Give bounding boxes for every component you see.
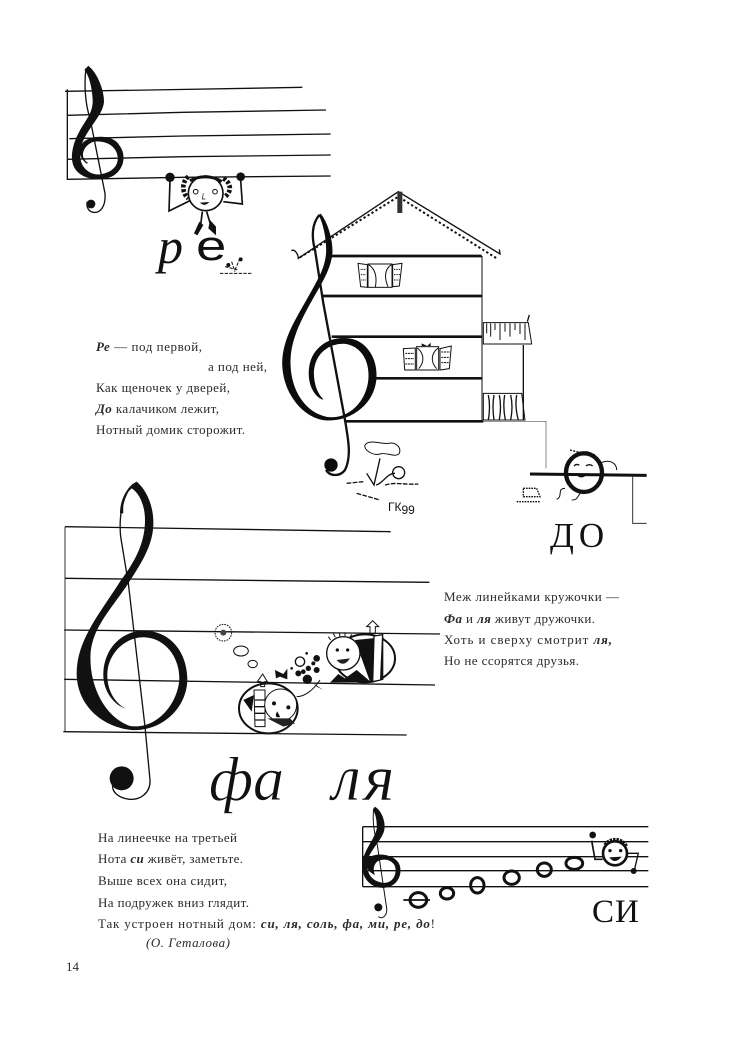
- text block: re and do verse: [95, 339, 267, 437]
- bouquet: [275, 652, 323, 697]
- treble clef huge: [77, 482, 187, 799]
- icon: flower and snail: [347, 442, 418, 500]
- text block: si verse: Нота си живёт, заметьте.: [98, 851, 243, 866]
- text block: si verse: На подружек вниз глядит.: [98, 895, 249, 910]
- text block: re and do verse: Нотный домик сторожит.: [96, 422, 245, 437]
- character: note fa: [239, 674, 298, 733]
- text block: re and do verse: До калачиком лежит,: [95, 401, 219, 416]
- text block: si verse: Выше всех она сидит,: [98, 873, 227, 888]
- text block: si verse: Так устроен нотный дом: си, ля, соль, фа, ми, ре, до!: [98, 916, 435, 931]
- text block: fa and la verse: [444, 589, 620, 668]
- initials: ГК: [388, 500, 402, 514]
- staff lines and walls: [322, 256, 483, 421]
- text block: re and do verse: а под ней,: [208, 359, 267, 374]
- text block: si verse: [98, 830, 435, 950]
- staff with treble clef: re: [65, 67, 331, 273]
- character: note do: [517, 450, 647, 523]
- house staff with large treble clef: [283, 192, 647, 523]
- window upper: [358, 263, 402, 287]
- icon: small flower: [220, 257, 253, 273]
- page number: 14: [66, 959, 80, 974]
- label: re: е: [196, 223, 226, 269]
- text block: si verse: На линеечке на третьей: [98, 830, 237, 845]
- character: note re: [165, 172, 245, 235]
- text block: fa and la verse: Но не ссорятся друзья.: [444, 653, 579, 668]
- window lower: [403, 343, 451, 370]
- small clouds: [215, 624, 257, 668]
- text block: fa and la verse: Меж линейками кружочки —: [444, 589, 620, 604]
- annex: [483, 315, 546, 468]
- author: (О. Геталова): [146, 935, 230, 950]
- label: do: ДО: [550, 516, 609, 555]
- treble clef: [73, 67, 123, 212]
- notes ascending: [403, 857, 583, 907]
- small staff with notes and si: [363, 807, 648, 918]
- big staff with treble clef and notes fa la: [63, 482, 440, 799]
- text block: fa and la verse: Фа и ля живут дружочки.: [444, 611, 595, 626]
- text block: re and do verse: Как щеночек у дверей,: [96, 380, 230, 395]
- label: la: ля: [328, 742, 397, 815]
- label: re: р: [155, 218, 183, 274]
- character: note la: [327, 621, 395, 683]
- text block: fa and la verse: Хоть и сверху смотрит ля,: [444, 632, 612, 647]
- roof: [291, 192, 500, 258]
- label: re: [155, 218, 226, 274]
- initials: 99: [402, 503, 415, 517]
- character: note si: [589, 832, 638, 874]
- text block: re and do verse: Ре — под первой,: [96, 339, 202, 354]
- treble clef large: [283, 214, 376, 475]
- treble clef small: [363, 807, 400, 918]
- label: fa: фа: [209, 746, 284, 814]
- label: si: СИ: [592, 894, 640, 930]
